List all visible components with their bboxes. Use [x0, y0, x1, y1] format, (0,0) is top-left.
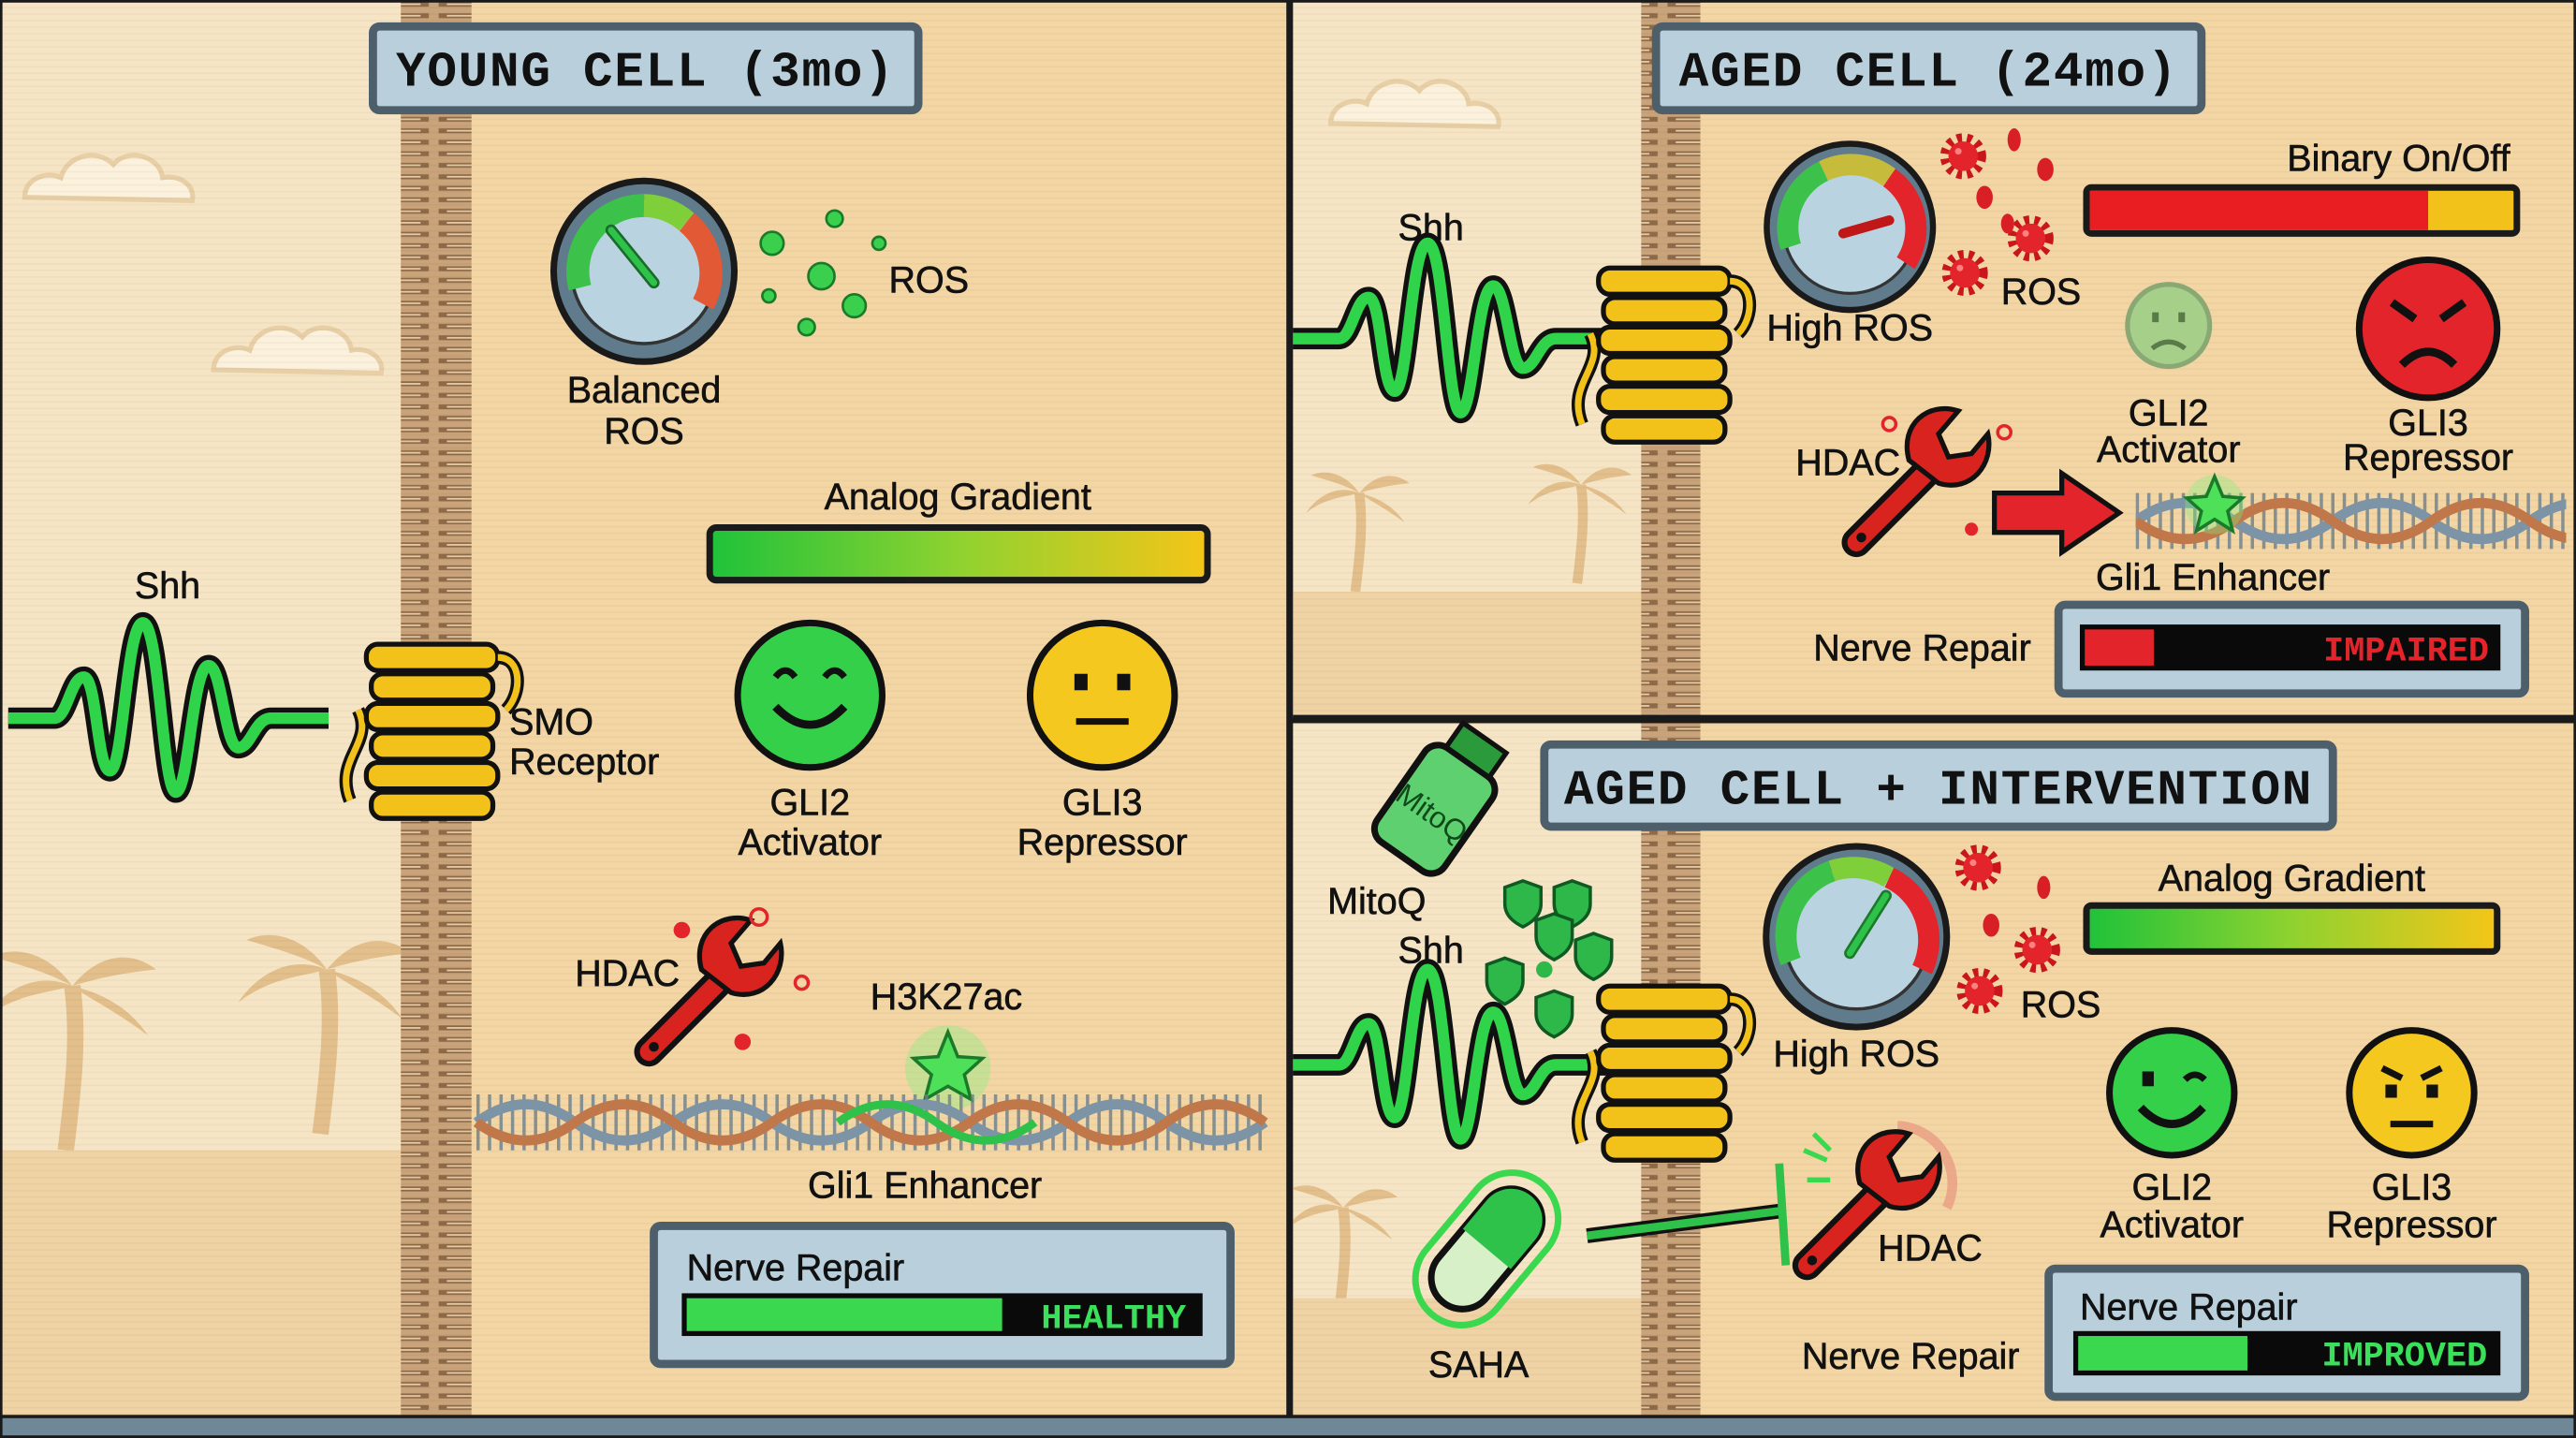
H3K27ac star mark: H3K27ac — [871, 976, 1022, 1018]
GLI3 repressor face neutral: GLI3 — [1062, 783, 1142, 824]
H3K27ac star mark — [871, 976, 1022, 1111]
GLI2 faded face aged: Activator — [2097, 429, 2241, 470]
HDAC wrench aged — [1795, 408, 2011, 542]
gauge: balanced ROS: Balanced — [567, 370, 721, 411]
title: intervention — [1544, 744, 2333, 827]
nerve repair improved: Nerve Repair — [1802, 1336, 2019, 1377]
ROS viruses aged: ROS — [2001, 271, 2081, 313]
GLI2 activator face happy: Activator — [738, 822, 882, 863]
title: young cell: YOUNG CELL (3mo) — [396, 44, 896, 100]
gauge intervention — [1766, 846, 1947, 1075]
Shh ligand wave: Shh — [135, 565, 200, 607]
receptor intervention — [1578, 986, 1749, 1160]
SAHA pill — [1397, 1154, 1577, 1386]
HDAC wrench inhibited — [1804, 1125, 1983, 1269]
GLI2 activator face happy — [738, 623, 882, 863]
GLI2 faded face aged: GLI2 — [2129, 393, 2209, 434]
ROS particles: green — [761, 211, 969, 335]
Shh wave aged — [1293, 207, 1614, 413]
nerve repair healthy: Nerve Repair — [687, 1247, 904, 1288]
ROS viruses aged — [1945, 128, 2081, 313]
GLI3 angry red face: Repressor — [2343, 437, 2513, 478]
HDAC wrench young: HDAC — [575, 953, 680, 994]
nerve repair improved — [1802, 1269, 2525, 1397]
GLI3 frown yellow face: Repressor — [2326, 1205, 2497, 1246]
GLI2 wink face: GLI2 — [2131, 1167, 2212, 1208]
DNA gli1 enhancer young — [476, 1105, 1265, 1207]
gauge: balanced ROS: ROS — [604, 411, 684, 452]
GLI3 frown yellow face: GLI3 — [2372, 1167, 2452, 1208]
nerve repair improved: Nerve Repair — [2080, 1286, 2297, 1328]
HDAC wrench young — [575, 909, 809, 1051]
nerve repair impaired: IMPAIRED — [2323, 633, 2489, 672]
Shh wave intervention — [1293, 931, 1614, 1138]
SAHA pill: SAHA — [1428, 1344, 1530, 1386]
Shh ligand wave — [8, 565, 329, 792]
ROS particles: green: ROS — [889, 260, 969, 301]
title: intervention: AGED CELL + INTERVENTION — [1564, 762, 2313, 818]
nerve repair impaired — [1813, 605, 2525, 694]
background: young cell panel — [0, 0, 1288, 1416]
GLI3 angry red face — [2343, 259, 2513, 478]
inhibition line — [1587, 1164, 1786, 1266]
SMO receptor: SMO — [509, 702, 593, 743]
gauge: balanced ROS — [553, 181, 735, 452]
DNA gli1 enhancer aged: Gli1 Enhancer — [2096, 557, 2330, 598]
binary on/off bar: Binary On/Off — [2287, 139, 2511, 180]
nerve repair healthy — [654, 1225, 1231, 1364]
MitoQ bottle — [1327, 714, 1518, 922]
gauge high ROS aged: High ROS — [1766, 307, 1933, 348]
SMO receptor — [346, 644, 659, 818]
analog gradient intervention: Analog Gradient — [2159, 858, 2425, 899]
title: aged cell — [1656, 26, 2202, 110]
analog gradient intervention — [2086, 858, 2497, 951]
HDAC wrench inhibited: HDAC — [1878, 1227, 1983, 1269]
MitoQ bottle: MitoQ — [1390, 776, 1474, 849]
ROS viruses intervention: ROS — [2021, 985, 2100, 1026]
GLI3 repressor face neutral: Repressor — [1017, 822, 1188, 863]
nerve repair improved: IMPROVED — [2321, 1338, 2487, 1377]
Shh wave aged: Shh — [1398, 207, 1464, 248]
GLI3 repressor face neutral — [1017, 623, 1188, 863]
antioxidant shields — [1486, 881, 1612, 1037]
gauge intervention: High ROS — [1773, 1034, 1939, 1075]
nerve repair impaired: Nerve Repair — [1813, 628, 2031, 669]
ROS viruses intervention — [1960, 850, 2100, 1026]
background: aged cell panel — [1293, 0, 2576, 718]
nerve repair healthy: HEALTHY — [1041, 1299, 1187, 1339]
GLI2 activator face happy: GLI2 — [769, 783, 850, 824]
GLI3 angry red face: GLI3 — [2388, 403, 2468, 444]
DNA gli1 enhancer aged — [2096, 475, 2576, 598]
Shh wave intervention: Shh — [1398, 931, 1464, 972]
SMO receptor: Receptor — [509, 741, 659, 783]
GLI2 wink face — [2100, 1031, 2244, 1246]
background: intervention panel — [1285, 723, 2576, 1416]
analog gradient bar — [710, 477, 1208, 580]
GLI3 frown yellow face — [2326, 1031, 2497, 1246]
binary on/off bar — [2086, 139, 2517, 233]
receptor aged — [1578, 268, 1749, 442]
HDAC wrench aged: HDAC — [1795, 442, 1900, 483]
GLI2 faded face aged — [2097, 285, 2241, 470]
gauge high ROS aged — [1766, 144, 1933, 348]
DNA gli1 enhancer young: Gli1 Enhancer — [808, 1166, 1042, 1207]
GLI2 wink face: Activator — [2100, 1205, 2244, 1246]
title: aged cell: AGED CELL (24mo) — [1679, 44, 2178, 100]
MitoQ bottle: MitoQ — [1327, 881, 1426, 922]
arrow red — [1995, 474, 2119, 552]
analog gradient bar: Analog Gradient — [825, 477, 1091, 518]
title: young cell — [373, 26, 918, 110]
